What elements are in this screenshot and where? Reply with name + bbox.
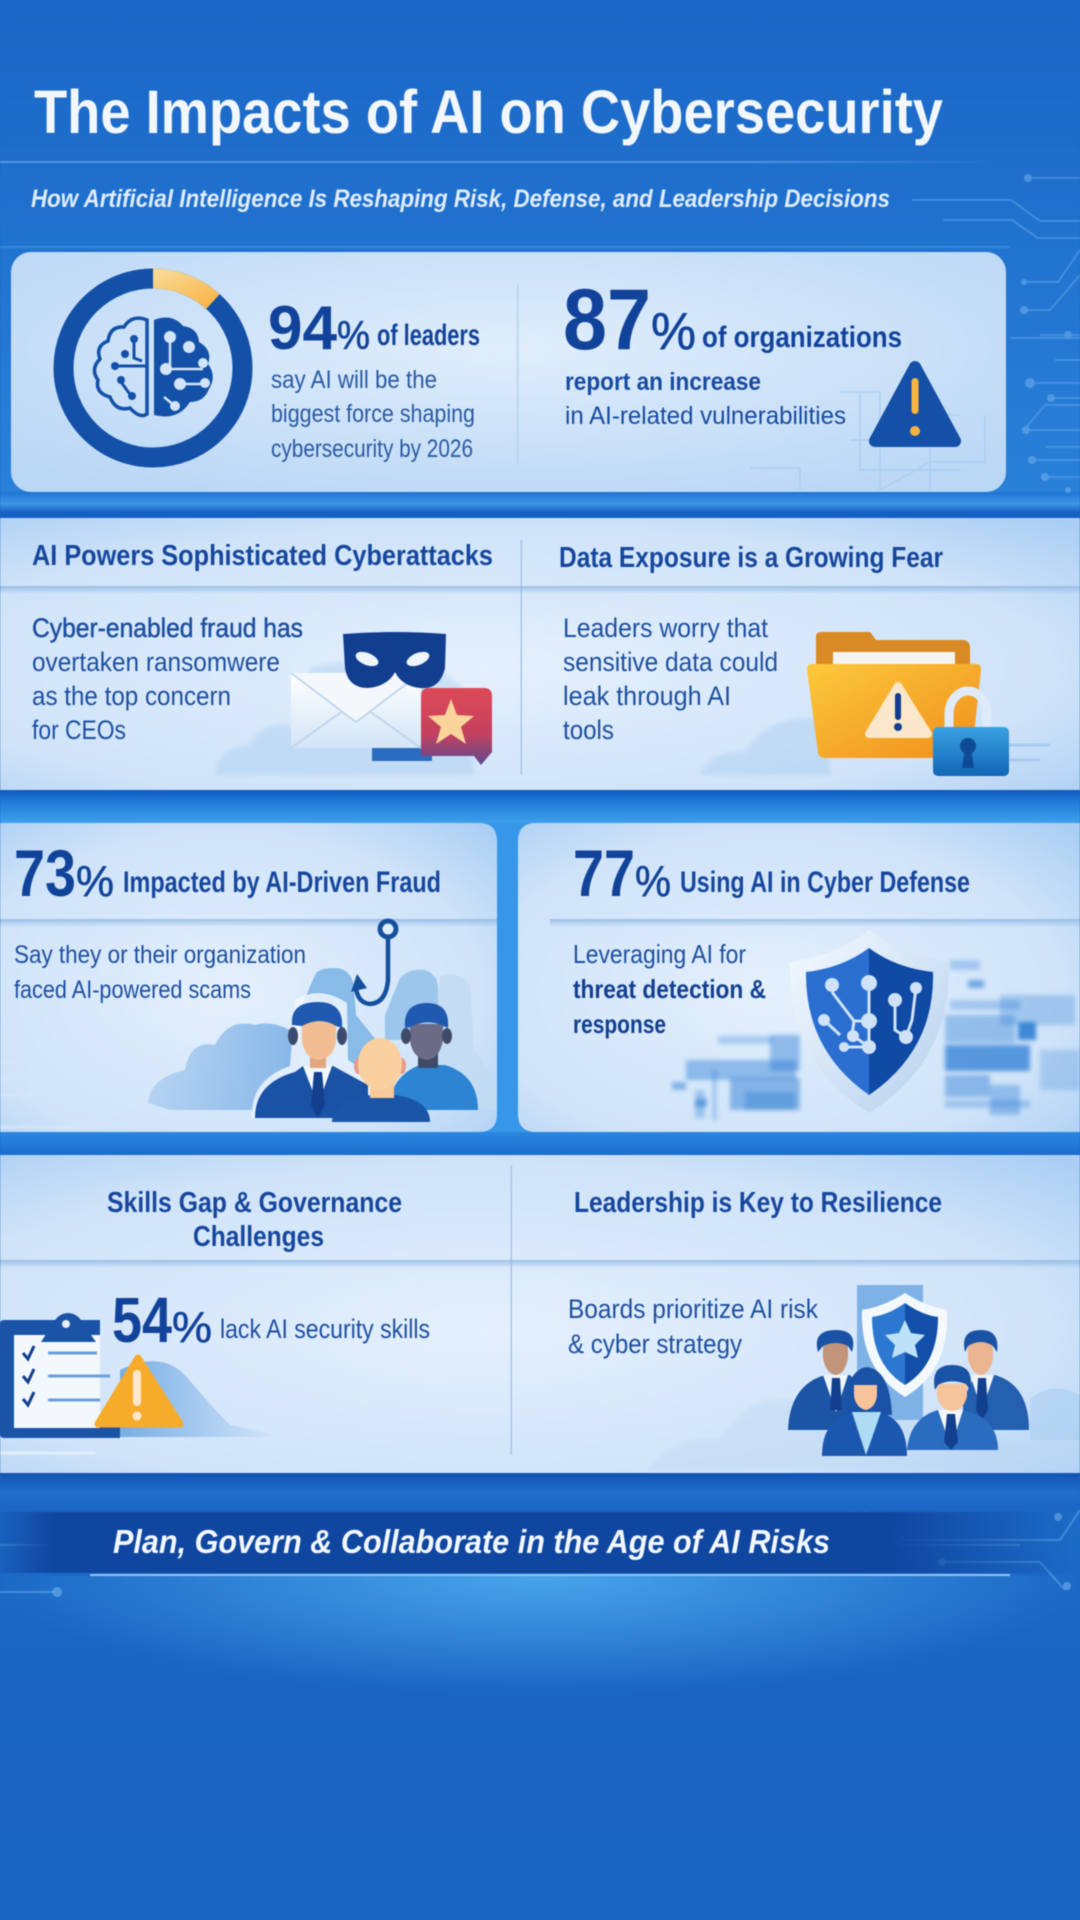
- connector: [0, 1452, 99, 1454]
- stat: 54 percent: [112, 1284, 430, 1356]
- text: defense description: threat detection &: [573, 974, 766, 1004]
- stat: 87 percent: [563, 272, 902, 368]
- folder back: [816, 632, 970, 700]
- text: fraud description: for CEOs: [32, 715, 126, 745]
- subtitle: How Artificial Intelligence Is Reshaping Risk, Defense, and Leadership Decisions: [31, 185, 890, 213]
- stat: 73 percent: [14, 836, 441, 910]
- stat: 77 percent: [573, 836, 970, 910]
- text: 87 percent description: in AI-related vulnerabilities: [565, 402, 846, 430]
- heading: cyberattacks: AI Powers Sophisticated Cyberattacks: [32, 540, 493, 572]
- text: fraud description: as the top concern: [32, 681, 231, 711]
- gap strip under metric cards: [0, 1132, 1080, 1155]
- icon: warning triangle: [875, 367, 955, 441]
- text: scam description: Say they or their organization: [14, 941, 306, 969]
- header separator: [0, 1260, 1080, 1268]
- background circuit traces: [912, 174, 1080, 493]
- stat: 94 percent: of leaders: [377, 319, 480, 352]
- leader woman: [822, 1367, 907, 1456]
- text: 87 percent description: [565, 368, 846, 430]
- stat: 94 percent: 94: [268, 294, 338, 363]
- text: leak description: tools: [563, 715, 614, 745]
- text: 94 percent description: [271, 366, 475, 463]
- panel: governance and leadership: [0, 1155, 1080, 1473]
- leader right: [963, 1330, 1029, 1430]
- text: leak description: sensitive data could: [563, 647, 778, 677]
- heading: leadership: Leadership is Key to Resilience: [574, 1187, 942, 1219]
- gap strip under lower panel: [0, 1473, 1080, 1512]
- icon: brain outline lobe: [94, 318, 147, 416]
- clipboard: [0, 1313, 120, 1438]
- stat: 94 percent: [268, 294, 480, 363]
- shield: [862, 1293, 947, 1397]
- warning sign: [869, 686, 928, 734]
- icon: data folder with warning and lock: [700, 632, 1050, 776]
- man with dark skin: [387, 1003, 478, 1110]
- title underline: [0, 161, 995, 163]
- text: scam description: [14, 941, 306, 1004]
- background crowd: [148, 968, 496, 1110]
- text: boards description: Boards prioritize AI risk: [568, 1294, 818, 1324]
- faint circuit backdrop: [750, 392, 985, 490]
- folder front: [807, 664, 981, 758]
- stat: 94 percent: %: [337, 314, 370, 358]
- stat: 87 percent: %: [651, 303, 696, 361]
- text: defense description: response: [573, 1009, 666, 1039]
- bald person: [332, 1038, 430, 1122]
- digital block pattern: [672, 960, 1080, 1120]
- heading: skills gap: [107, 1187, 402, 1253]
- footer glow: [0, 1576, 1080, 1816]
- mask: [343, 632, 446, 688]
- text: defense description: [573, 939, 766, 1039]
- warning triangle: [98, 1358, 180, 1424]
- stat: 54 percent: 54: [112, 1284, 172, 1356]
- text: leak description: [563, 613, 778, 745]
- stat: 73 percent: Impacted by AI-Driven Fraud: [123, 866, 441, 899]
- stat: 87 percent: of organizations: [702, 321, 902, 354]
- stat: 77 percent: Using AI in Cyber Defense: [680, 866, 970, 899]
- footer text: Plan, Govern & Collaborate in the Age of AI Risks: [113, 1523, 830, 1560]
- stat: 54 percent: lack AI security skills: [220, 1314, 430, 1344]
- illustration: leadership team with shield: [650, 1285, 1080, 1470]
- padlock: [933, 691, 1009, 776]
- title: The Impacts of AI on Cybersecurity: [34, 78, 943, 146]
- text: fraud description: overtaken ransomwere: [32, 647, 280, 677]
- card: AI-driven fraud: [0, 823, 497, 1132]
- backdrop behind metric cards: [0, 823, 1080, 1132]
- text: boards description: [568, 1294, 818, 1359]
- divider: [517, 285, 518, 465]
- stat: 54 percent: %: [172, 1303, 212, 1352]
- text: leak description: leak through AI: [563, 681, 731, 711]
- text: 94 percent description: biggest force shaping: [271, 400, 475, 428]
- heading: skills gap: Challenges: [193, 1221, 324, 1253]
- text: boards description: & cyber strategy: [568, 1329, 742, 1359]
- footer banner: [0, 1512, 1080, 1576]
- card: AI in cyber defense: [518, 823, 1080, 1132]
- icon: brain circuit lobe: [111, 318, 213, 416]
- leader left: [788, 1330, 872, 1430]
- illustration: people targeted by phishing hook: [148, 921, 496, 1122]
- stat: 87 percent: 87: [563, 272, 651, 368]
- header separator: [550, 919, 1080, 927]
- icon: brain progress ring: [64, 278, 242, 458]
- icon: phishing envelope with mask: [215, 632, 492, 775]
- icon: checklist with warning: [0, 1313, 278, 1458]
- divider: [510, 1165, 512, 1455]
- text: leak description: Leaders worry that: [563, 613, 768, 643]
- panel: threat overview: [0, 518, 1080, 790]
- text: fraud description: [32, 613, 303, 745]
- text: scam description: faced AI-powered scams: [14, 976, 251, 1004]
- icon: phishing hook: [351, 921, 396, 1004]
- footer circuit traces: [0, 1510, 1080, 1597]
- leader front: [907, 1365, 998, 1450]
- heading: skills gap: Skills Gap & Governance: [107, 1187, 402, 1219]
- stat: 73 percent: 73: [14, 836, 76, 910]
- badge with star: [421, 688, 492, 765]
- faint circuit traces: [0, 1062, 105, 1127]
- clouds: [650, 1400, 1080, 1470]
- text: 94 percent description: say AI will be the: [271, 366, 437, 394]
- header separator: [0, 919, 497, 927]
- header separator: [0, 586, 1080, 594]
- gap strip under stats panel: [0, 492, 1080, 518]
- gap strip under threat panel: [0, 790, 1080, 823]
- text: defense description: Leveraging AI for: [573, 939, 746, 969]
- icon: AI shield: [790, 930, 949, 1113]
- text: 94 percent description: cybersecurity by 2026: [271, 435, 473, 463]
- man in suit: [252, 993, 370, 1118]
- cloud: [120, 1361, 278, 1437]
- heading: data exposure: Data Exposure is a Growing Fear: [559, 542, 943, 574]
- text: 87 percent description: report an increase: [565, 368, 761, 396]
- envelope: [291, 673, 421, 748]
- panel: headline statistics: [0, 246, 1010, 492]
- stat: 73 percent: %: [76, 857, 114, 906]
- stat: 77 percent: %: [635, 857, 671, 906]
- divider: [520, 540, 522, 775]
- stat: 77 percent: 77: [573, 836, 635, 910]
- text: fraud description: Cyber-enabled fraud has: [32, 613, 303, 643]
